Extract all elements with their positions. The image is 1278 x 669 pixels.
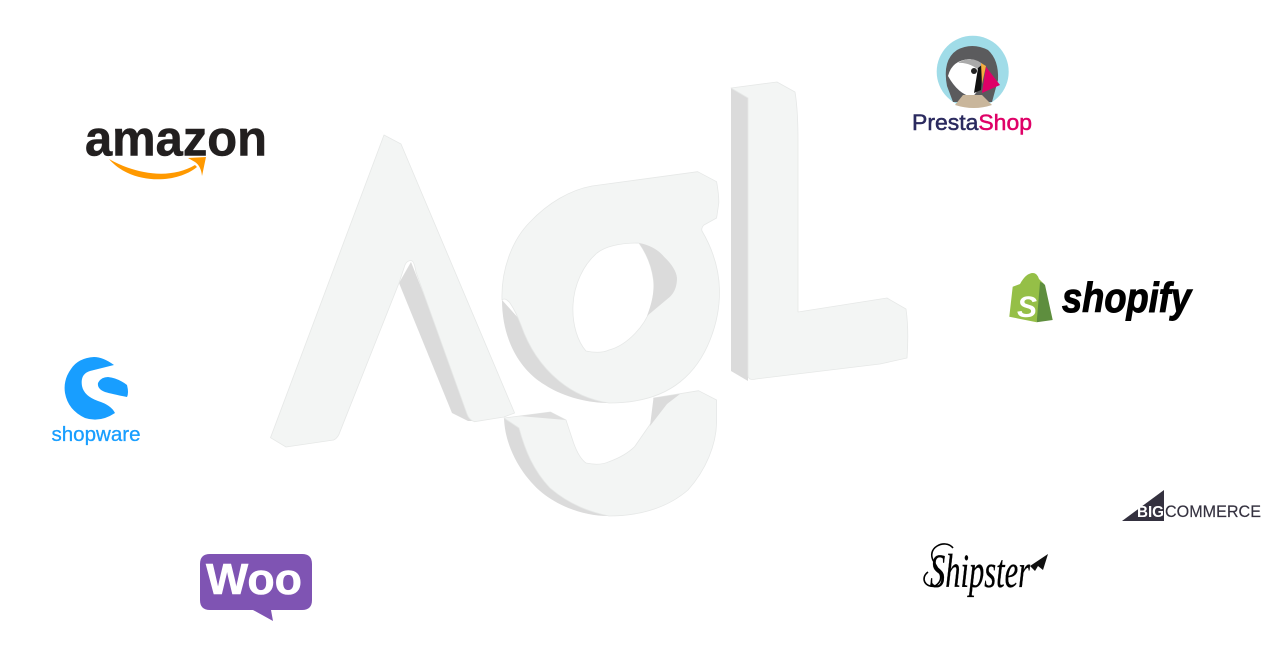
letter g bowl bbox=[502, 172, 720, 403]
logo: prestashop bbox=[912, 36, 1032, 135]
letter L bbox=[731, 82, 908, 381]
logo: bigcommerce bbox=[1122, 490, 1261, 521]
letter g descender bbox=[504, 391, 717, 516]
logo: shopify: S bbox=[1017, 291, 1037, 324]
logo: shopware: shopware bbox=[52, 424, 140, 446]
logo: woo: Woo bbox=[206, 555, 302, 604]
logo: woo bbox=[200, 554, 312, 621]
logo: shipster: Shipster bbox=[930, 545, 1030, 598]
logo: shopify: shopify bbox=[1062, 274, 1193, 321]
logo: bigcommerce: BIG bbox=[1137, 504, 1164, 521]
logo: shopify bbox=[1009, 273, 1193, 324]
central 3D AgL monogram bbox=[270, 82, 908, 516]
letter A bbox=[270, 135, 515, 447]
logo: amazon: amazon bbox=[85, 110, 267, 166]
logo: shopware bbox=[52, 357, 140, 446]
logo: bigcommerce: COMMERCE bbox=[1165, 503, 1261, 521]
logo: prestashop: PrestaShop bbox=[912, 110, 1032, 135]
